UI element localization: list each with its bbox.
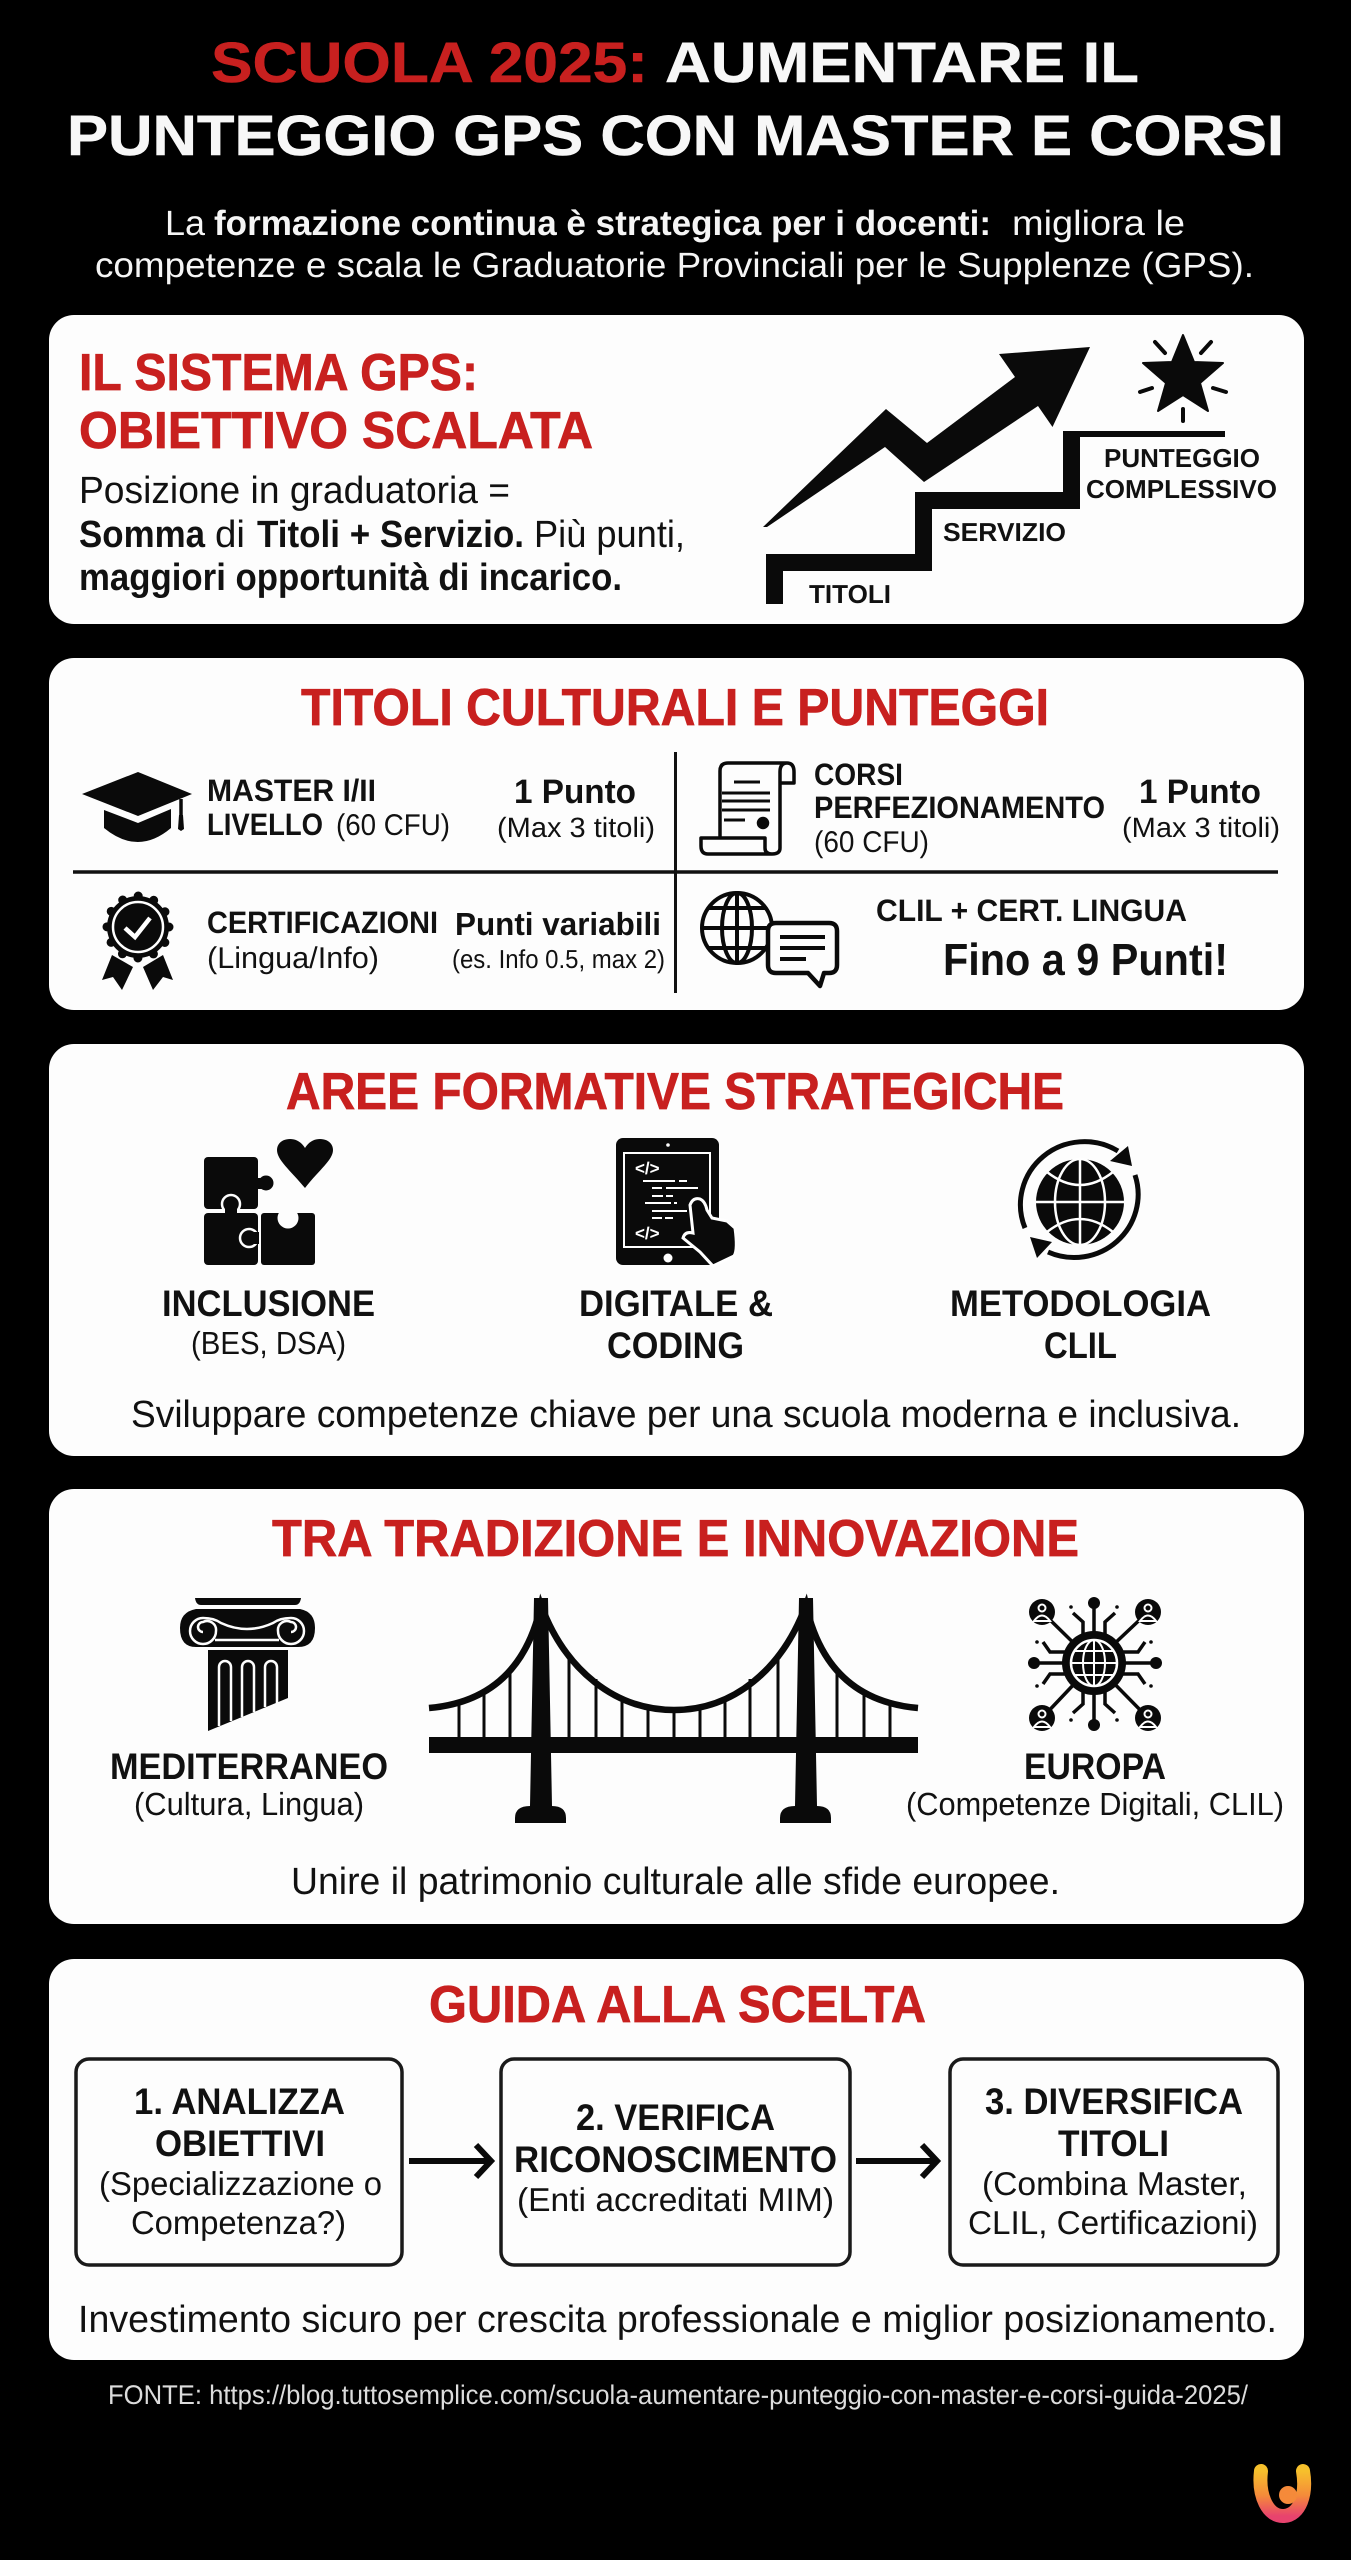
cell: corsi perfezionamento: (60 CFU) [814, 826, 929, 859]
title: PUNTEGGIO GPS CON MASTER E CORSI [67, 104, 1284, 168]
heading: guida alla scelta: GUIDA ALLA SCELTA [429, 1976, 926, 2034]
arrow: step 2 to step 3 [856, 2145, 937, 2177]
step 1: analizza obiettivi: 1. ANALIZZA [134, 2081, 345, 2122]
icon: diploma scroll [701, 763, 794, 854]
cell: CLIL e certificazione lingua: CLIL + CERT. LINGUA [876, 893, 1187, 928]
step 2: verifica riconoscimento [501, 2059, 850, 2265]
text block: posizione in graduatoria: Più punti, [534, 514, 685, 556]
step 2: verifica riconoscimento: RICONOSCIMENTO [514, 2139, 837, 2180]
heading: titoli culturali: TITOLI CULTURALI E PUNTEGGI [301, 679, 1049, 737]
label: mediterraneo [110, 1746, 388, 1822]
icon: star [1140, 335, 1226, 421]
title [67, 31, 1284, 168]
area: inclusione [162, 1283, 375, 1361]
chart: staircase with rising arrow: PUNTEGGIO [1104, 443, 1260, 473]
cell: CLIL e certificazione lingua: Fino a 9 Punti! [943, 934, 1228, 985]
chart: staircase with rising arrow: SERVIZIO [943, 517, 1066, 547]
text block: investimento sicuro: Investimento sicuro per crescita professionale e miglior posizionamento. [78, 2299, 1277, 2341]
area: digitale e coding: DIGITALE & [579, 1283, 773, 1324]
area: inclusione: INCLUSIONE [162, 1283, 375, 1324]
step 3: diversifica titoli: (Combina Master, [982, 2165, 1247, 2202]
icon: certification badge [102, 896, 173, 990]
icon: tablet with code: </> [635, 1159, 660, 1178]
icon: rotating globe [1020, 1142, 1138, 1258]
panel: tra tradizione e innovazione [49, 1489, 1304, 1924]
cell: master: 1 Punto [514, 773, 636, 811]
icon: graduation cap [82, 772, 192, 842]
step 2: verifica riconoscimento: (Enti accreditati MIM) [517, 2181, 834, 2218]
text block: posizione in graduatoria: Posizione in graduatoria = [79, 470, 510, 512]
label: mediterraneo: (Cultura, Lingua) [134, 1786, 364, 1822]
area: metodologia CLIL [950, 1283, 1211, 1366]
step 1: analizza obiettivi: Competenza?) [131, 2204, 346, 2241]
cell: corsi perfezionamento: (Max 3 titoli) [1122, 812, 1280, 843]
text block: sviluppare competenze: Sviluppare competenze chiave per una scuola moderna e inclusiva. [131, 1394, 1241, 1436]
icon: digital network globe [1028, 1597, 1162, 1731]
area: digitale e coding: CODING [607, 1325, 744, 1366]
label: mediterraneo: MEDITERRANEO [110, 1746, 388, 1787]
step 1: analizza obiettivi: (Specializzazione o [99, 2165, 382, 2202]
area: inclusione: (BES, DSA) [191, 1325, 346, 1361]
subtitle: formazione continua è strategica per i docenti: [214, 204, 991, 243]
icon: tablet with code: </> [635, 1224, 660, 1243]
step 3: diversifica titoli: CLIL, Certificazioni) [968, 2204, 1258, 2241]
icon: tablet with code [616, 1138, 736, 1266]
icon: puzzle and heart [204, 1139, 333, 1265]
area: metodologia CLIL: METODOLOGIA [950, 1283, 1211, 1324]
text block: posizione in graduatoria: maggiori opportunità di incarico. [79, 557, 622, 599]
heading: il sistema GPS: OBIETTIVO SCALATA [79, 402, 593, 460]
step 3: diversifica titoli: TITOLI [1058, 2123, 1169, 2164]
area: digitale e coding [579, 1283, 773, 1366]
subtitle: La [165, 204, 206, 243]
chart: staircase with rising arrow: TITOLI [809, 579, 891, 609]
step 3: diversifica titoli: 3. DIVERSIFICA [985, 2081, 1243, 2122]
subtitle: migliora le [1012, 204, 1185, 243]
cell: master: LIVELLO [207, 807, 323, 842]
step 2: verifica riconoscimento: 2. VERIFICA [576, 2097, 775, 2138]
cell: master: (Max 3 titoli) [497, 812, 655, 843]
title: AUMENTARE IL [665, 31, 1139, 95]
icon: logo [1260, 2471, 1304, 2516]
source line: FONTE: https://blog.tuttosemplice.com/scuola-aumentare-punteggio-con-master-e-corsi-guida-2025/ [108, 2380, 1248, 2410]
cell: certificazioni: CERTIFICAZIONI [207, 905, 438, 940]
panel: guida alla scelta [49, 1959, 1304, 2360]
cell: master: MASTER I/II [207, 773, 376, 808]
panel: il sistema GPS [49, 315, 1304, 624]
heading: tradizione e innovazione: TRA TRADIZIONE E INNOVAZIONE [272, 1510, 1079, 1568]
text block: unire il patrimonio: Unire il patrimonio culturale alle sfide europee. [291, 1861, 1060, 1903]
text block: posizione in graduatoria: di [215, 514, 245, 556]
cell: corsi perfezionamento [814, 757, 1280, 859]
step 1: analizza obiettivi [76, 2059, 402, 2265]
label: europa [906, 1746, 1284, 1822]
cell: certificazioni: (Lingua/Info) [207, 942, 379, 975]
cell: certificazioni [207, 905, 665, 975]
chart: staircase with rising arrow [763, 335, 1277, 609]
step 1: analizza obiettivi: OBIETTIVI [155, 2123, 325, 2164]
cell: master: (60 CFU) [336, 809, 450, 842]
label: europa: (Competenze Digitali, CLIL) [906, 1786, 1284, 1822]
cell: master [207, 773, 655, 843]
heading: aree formative: AREE FORMATIVE STRATEGICHE [286, 1063, 1064, 1121]
subtitle: competenze e scala le Graduatorie Provinciali per le Supplenze (GPS). [95, 246, 1254, 285]
cell: corsi perfezionamento: CORSI [814, 757, 903, 792]
arrow: step 1 to step 2 [409, 2145, 491, 2177]
area: metodologia CLIL: CLIL [1044, 1325, 1117, 1366]
heading: il sistema GPS [79, 344, 593, 460]
cell: CLIL e certificazione lingua [876, 893, 1228, 985]
cell: certificazioni: Punti variabili [455, 906, 661, 942]
icon: ionic column [180, 1598, 315, 1731]
chart: staircase with rising arrow: COMPLESSIVO [1086, 474, 1277, 504]
text block: posizione in graduatoria [79, 470, 685, 599]
heading: il sistema GPS: IL SISTEMA GPS: [79, 344, 478, 402]
icon: globe and speech bubble [702, 893, 837, 986]
text block: posizione in graduatoria: Somma [79, 514, 206, 556]
label: europa: EUROPA [1024, 1746, 1166, 1787]
panel: titoli culturali e punteggi [49, 658, 1304, 1010]
cell: corsi perfezionamento: 1 Punto [1139, 773, 1261, 811]
panel: aree formative strategiche [49, 1044, 1304, 1456]
cell: corsi perfezionamento: PERFEZIONAMENTO [814, 790, 1105, 825]
title: SCUOLA 2025: [211, 31, 648, 95]
icon: suspension bridge [429, 1598, 918, 1823]
subtitle [95, 204, 1254, 285]
text block: posizione in graduatoria: Titoli + Servizio. [257, 514, 524, 556]
cell: certificazioni: (es. Info 0.5, max 2) [452, 944, 665, 974]
step 3: diversifica titoli [950, 2059, 1278, 2265]
